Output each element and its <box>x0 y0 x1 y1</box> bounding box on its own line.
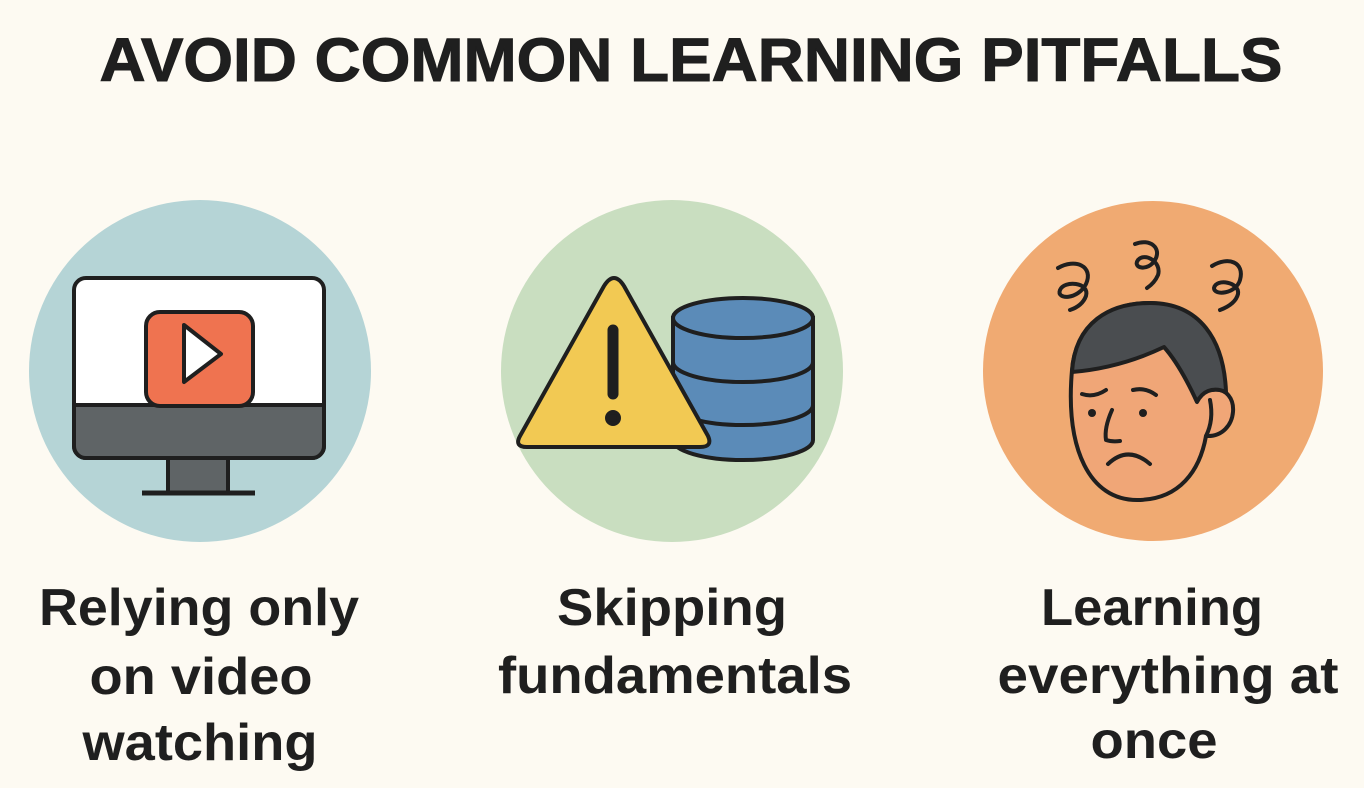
icon: monitor <box>74 278 324 493</box>
icon: confused face <box>1058 242 1241 500</box>
label: fundamentals <box>498 647 852 705</box>
label: Relying only <box>39 579 359 637</box>
title: AVOID COMMON LEARNING PITFALLS <box>100 26 1282 94</box>
icon circle blue <box>29 200 371 542</box>
panel: learning everything <box>983 201 1338 770</box>
label <box>498 579 852 705</box>
label <box>39 579 359 772</box>
squiggles <box>1058 264 1088 310</box>
label <box>998 579 1338 770</box>
panel: video watching <box>29 200 371 772</box>
icon circle orange <box>983 201 1323 541</box>
label: everything at <box>998 647 1338 705</box>
icon: warning triangle <box>518 278 709 447</box>
label: watching <box>81 714 317 772</box>
panel: skipping fundamentals <box>498 200 852 705</box>
label: Skipping <box>557 579 787 637</box>
icon: database <box>673 298 813 460</box>
label: Learning <box>1041 579 1263 637</box>
label: on video <box>90 648 312 706</box>
label: once <box>1090 712 1218 770</box>
icon circle green <box>501 200 843 542</box>
